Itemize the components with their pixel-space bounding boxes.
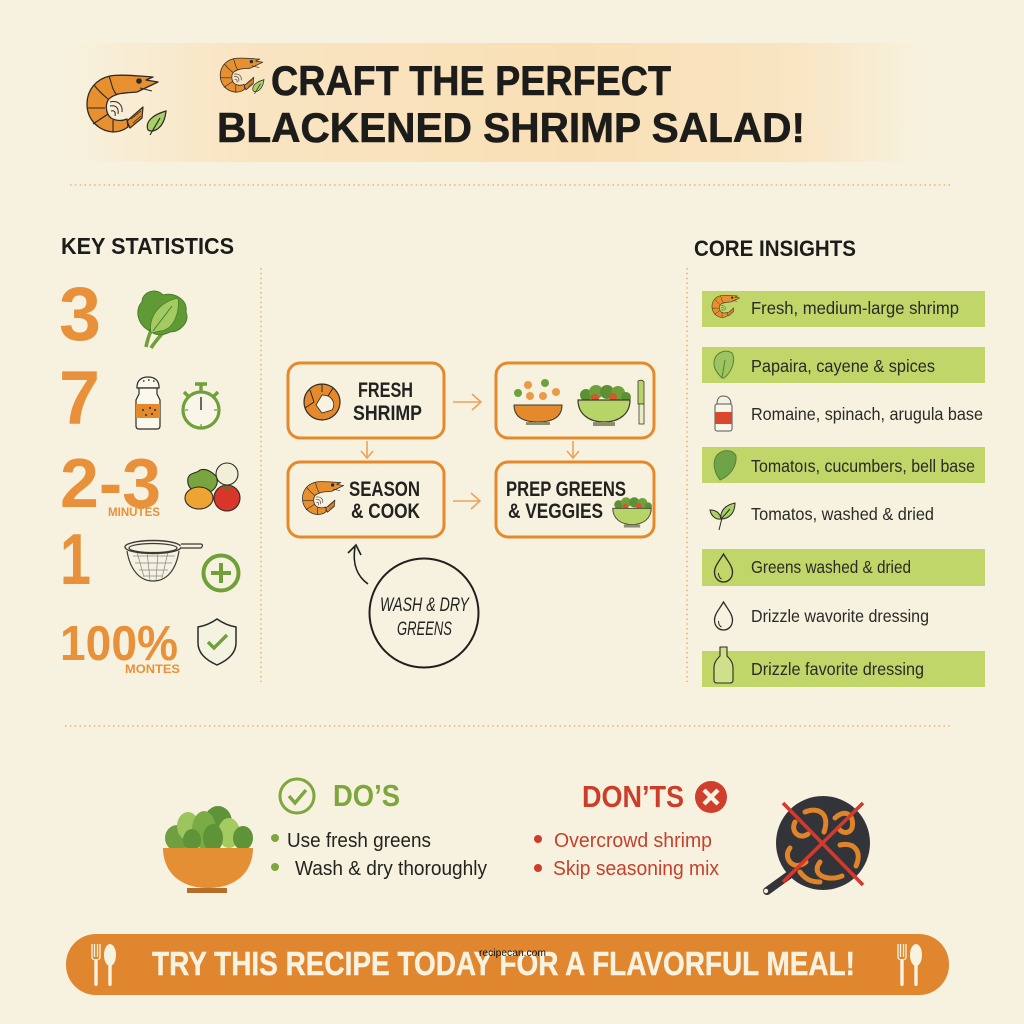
- insight bars: [702, 291, 985, 687]
- arrow: bowls down: [567, 441, 579, 458]
- bullet: overcrowd shrimp: Overcrowd shrimp: [554, 830, 712, 852]
- step: prep greens and veggies: & VEGGIES: [508, 500, 603, 523]
- heading: core insights: CORE INSIGHTS: [694, 236, 856, 261]
- icon: stopwatch: [183, 384, 219, 428]
- step: prep greens and veggies: PREP GREENS: [506, 478, 626, 501]
- icon: small shrimp with leaf: [220, 58, 264, 94]
- insight 8: [714, 647, 924, 683]
- insight 2: Papaira, cayene & spices: [751, 356, 935, 376]
- icon: plus circle: [204, 556, 238, 590]
- title: [217, 57, 805, 151]
- icon: strainer: [125, 540, 202, 581]
- step: bowls and knife: [496, 363, 654, 438]
- insight 8: Drizzle favorite dressing: [751, 659, 924, 679]
- panel: don'ts: [534, 779, 870, 893]
- callout: wash and dry greens: WASH & DRY: [380, 595, 470, 616]
- insight 6: [714, 554, 911, 582]
- icon: vegetables: [185, 463, 240, 511]
- insight 3: [715, 396, 983, 431]
- insight 7: [714, 602, 929, 630]
- step: season and cook: & COOK: [351, 500, 420, 523]
- heading: don'ts: DON’TS: [582, 779, 684, 814]
- heading: key statistics: KEY STATISTICS: [61, 233, 234, 259]
- stat: 2-3 minutes: MINUTES: [108, 505, 160, 519]
- insight 6: Greens washed & dried: [751, 557, 911, 577]
- step: fresh shrimp: SHRIMP: [353, 402, 422, 425]
- icon: right cutlery: [898, 944, 922, 986]
- panel: core insights: [694, 236, 985, 687]
- step: prep greens and veggies: [496, 462, 654, 537]
- step: season and cook: SEASON: [349, 478, 420, 501]
- bullet: use fresh greens: Use fresh greens: [287, 830, 431, 852]
- stat: 100%: 100%: [60, 617, 178, 671]
- insight 5: Tomatos, washed & dried: [751, 504, 934, 524]
- arrow: callout to season: [348, 545, 368, 584]
- title: BLACKENED SHRIMP SALAD!: [217, 104, 805, 151]
- callout: wash and dry greens: GREENS: [397, 619, 452, 640]
- heading: do's: DO’S: [333, 778, 400, 813]
- stat: 3: 3: [59, 272, 101, 357]
- bullet: skip seasoning: Skip seasoning mix: [553, 858, 719, 880]
- step: fresh shrimp: FRESH: [358, 379, 413, 402]
- arrow: season to prep: [453, 493, 480, 509]
- insight 7: Drizzle wavorite dressing: [751, 606, 929, 626]
- insight 2: [714, 351, 935, 378]
- icon: check circle: [280, 779, 314, 813]
- panel: process flow: [288, 363, 654, 668]
- title band: [60, 43, 925, 162]
- arrow: fresh shrimp to bowls: [453, 394, 481, 410]
- step: season and cook: [288, 462, 444, 537]
- bullet: wash and dry: Wash & dry thoroughly: [295, 858, 487, 880]
- step: fresh shrimp: [288, 363, 444, 438]
- banner: call to action: TRY THIS RECIPE TODAY FOR A FLAVORFUL MEAL!: [152, 945, 855, 982]
- icon: large shrimp with leaf: [87, 75, 166, 135]
- icon: left cutlery: [92, 944, 116, 986]
- watermark: recipecan.com: [479, 948, 546, 959]
- stat: 2-3 minutes: 2-3: [60, 444, 161, 522]
- icon: salad bowl: [163, 806, 253, 893]
- insight 4: Tomatoıs, cucumbers, bell base: [751, 456, 975, 476]
- stat: 100%: MONTES: [125, 662, 180, 676]
- icon: x circle: [695, 781, 727, 813]
- icon: spice shaker: [136, 377, 160, 429]
- insight 1: Fresh, medium-large shrimp: [751, 298, 959, 318]
- insight 4: [714, 451, 975, 480]
- icon: shield check: [198, 619, 236, 665]
- icon: spinach: [138, 291, 187, 348]
- panel: key statistics: [59, 233, 240, 676]
- icon: crossed-out crowded pan: [764, 796, 870, 893]
- insight 5: [710, 503, 934, 530]
- panel: do's: [163, 778, 487, 893]
- insight 3: Romaine, spinach, arugula base: [751, 404, 983, 424]
- stat: 7: 7: [59, 356, 100, 441]
- banner: call to action: [66, 934, 949, 995]
- callout: wash and dry greens: [370, 558, 478, 668]
- arrow: fresh shrimp down: [361, 441, 373, 458]
- title: CRAFT THE PERFECT: [271, 57, 671, 104]
- stat: 1: 1: [60, 520, 91, 600]
